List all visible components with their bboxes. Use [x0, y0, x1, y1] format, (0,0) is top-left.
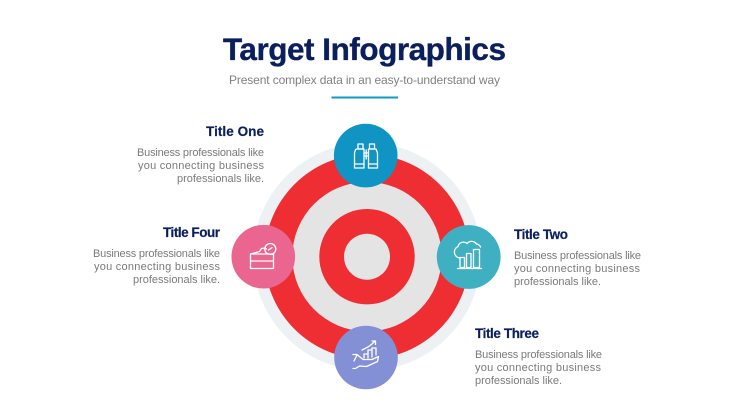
icon: hand holding rising chart	[353, 341, 378, 368]
text block: title one: professionals like.	[177, 173, 264, 185]
icon: bar chart with cloud	[454, 241, 482, 268]
text block: title four: professionals like.	[133, 274, 220, 286]
subtitle: Present complex data in an easy-to-understand way	[229, 73, 500, 87]
text block: title one	[137, 124, 264, 185]
text block: title one: Title One	[206, 124, 264, 139]
text block: title four: you connecting business	[94, 261, 220, 273]
icon: binoculars	[354, 144, 378, 168]
badge: hand with chart	[334, 326, 398, 389]
text block: title four: Title Four	[163, 225, 221, 240]
badge: cake with clock	[231, 225, 295, 288]
text block: title two: Title Two	[514, 227, 568, 242]
icon: briefcase with clock	[250, 244, 276, 268]
text block: title two	[514, 227, 641, 288]
text block: title two: you connecting business	[514, 263, 640, 275]
text block: title three: Title Three	[475, 326, 539, 341]
text block: title one: you connecting business	[138, 160, 264, 172]
text block: title three: you connecting business	[475, 362, 602, 374]
text block: title four	[93, 225, 221, 286]
text block: title three: professionals like.	[475, 375, 562, 387]
text block: title four: Business professionals like	[93, 248, 220, 260]
text block: title two: professionals like.	[514, 276, 601, 288]
text block: title three: Business professionals like	[475, 349, 602, 361]
text block: title two: Business professionals like	[514, 250, 641, 262]
title underline	[332, 96, 398, 98]
title: Target Infographics	[223, 31, 506, 67]
target chart	[253, 143, 481, 371]
text block: title three	[475, 326, 602, 387]
badge: binoculars	[334, 124, 398, 187]
badge: chart with cloud	[437, 225, 501, 289]
text block: title one: Business professionals like	[137, 147, 264, 159]
